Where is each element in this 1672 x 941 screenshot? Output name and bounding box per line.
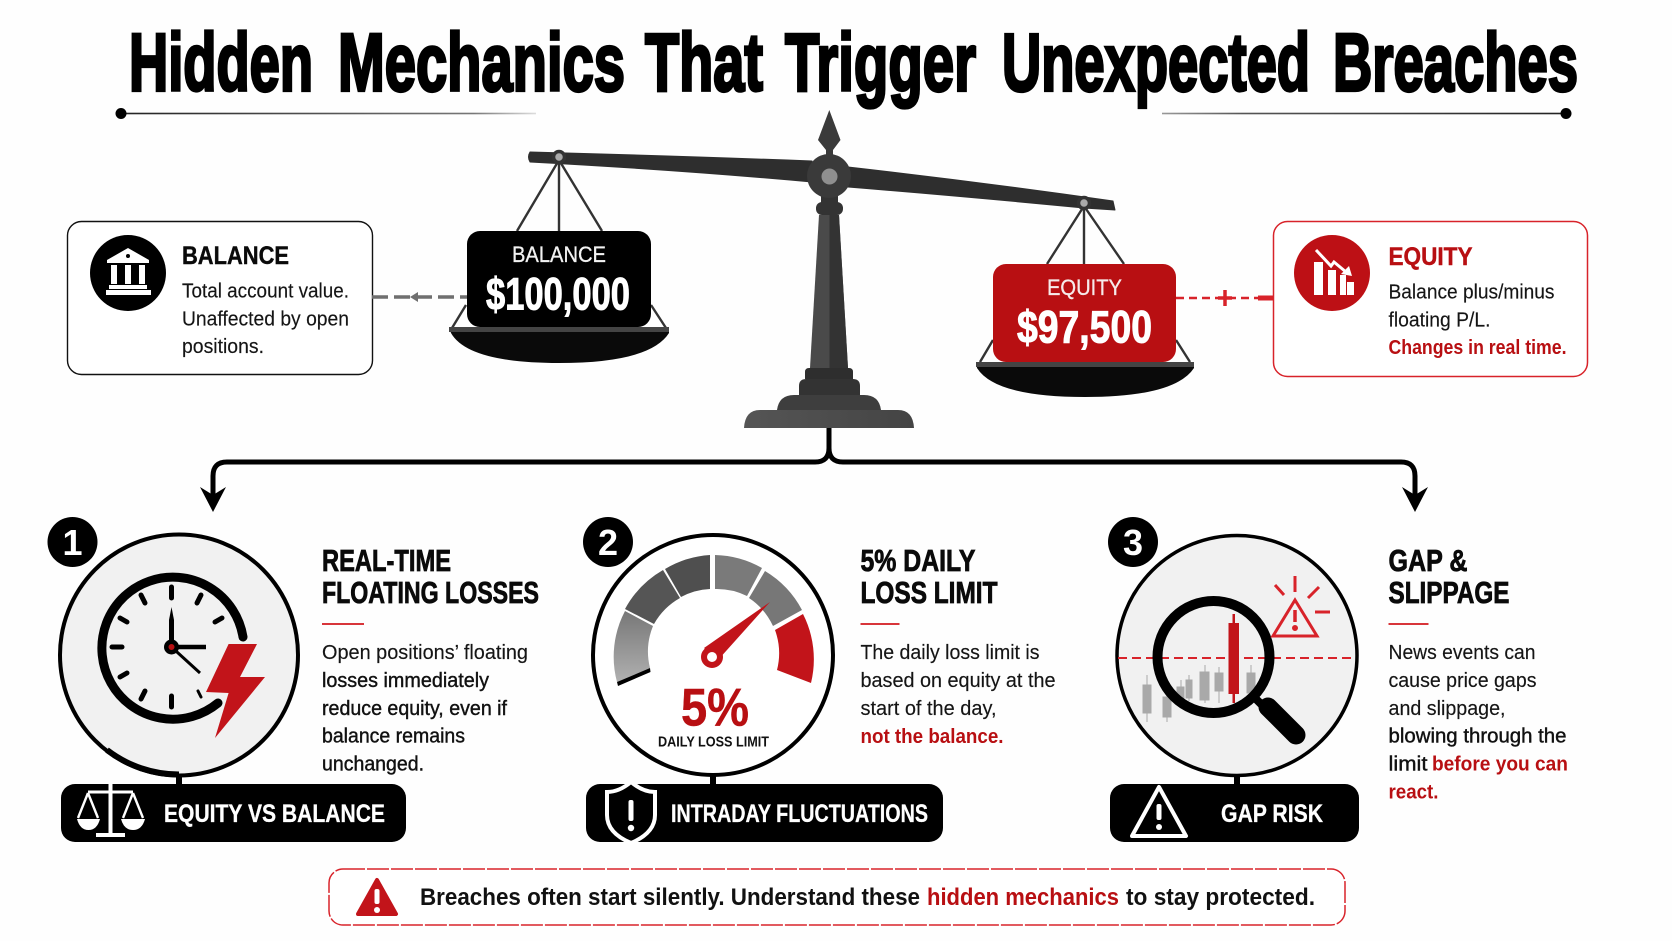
text 1: reduce equity, even if [322,698,507,720]
footer callout [329,869,1345,925]
balance sign: BALANCE [512,242,606,267]
text 3: before you can [1432,754,1568,776]
pill: intraday fluctuations [586,782,943,843]
chart medallion [1117,536,1357,786]
red candlestick [1228,614,1239,703]
text 3: blowing through the [1388,726,1566,748]
gauge medallion [593,535,833,786]
icon: clock [102,577,243,719]
text 2 [860,642,1056,748]
equity sign: $97,500 [1017,302,1152,352]
title: That [645,18,763,108]
heading 3: SLIPPAGE [1388,575,1510,610]
connector: equity sign to panel [1176,290,1273,306]
equity heading: EQUITY [1388,243,1473,271]
equity info panel [1274,222,1588,376]
heading 2: LOSS LIMIT [860,575,998,610]
pill: equity vs balance: EQUITY VS BALANCE [164,800,385,828]
section 1: real-time floating losses [48,517,539,842]
icon: alert triangle [1273,576,1330,636]
right pan [976,362,1194,397]
equity description: floating P/L. [1388,310,1490,332]
text 1: balance remains [322,726,465,748]
balance description [182,280,349,358]
gauge needle [704,602,770,665]
icon: lightning bolt [206,644,265,738]
title: Mechanics [338,18,625,108]
text 1: losses immediately [322,670,489,692]
beam finial and pivot [807,110,851,198]
title [129,18,1578,108]
heading 3 [1388,543,1510,610]
branching arrows [200,428,1428,512]
title divider right [1162,108,1572,119]
right hanger [980,198,1190,362]
text 3: react. [1388,782,1438,804]
icon: warning triangle [1132,787,1186,836]
text 3: News events can [1388,642,1536,664]
balance description: Unaffected by open [182,308,349,330]
balance sign [467,231,651,327]
icon: shield [607,782,655,843]
balance sign: $100,000 [486,268,630,320]
heading 1 [322,543,539,610]
left hanger [452,152,666,328]
arrowhead right [1402,487,1428,512]
number badge 3 [1108,517,1158,567]
text 1: Open positions’ floating [322,642,528,664]
text 1: unchanged. [322,754,424,776]
icon: scales [77,782,145,835]
text 3: limit [1388,754,1428,776]
title: Unexpected [1002,18,1310,108]
text 3: cause price gaps [1388,670,1536,692]
gauge dial [614,555,814,686]
footer message: Breaches often start silently. Understand these [420,884,920,911]
left pan [449,327,669,363]
heading 1: FLOATING LOSSES [322,575,539,610]
text 2: start of the day, [860,698,996,720]
pill: gap risk [1110,784,1359,842]
scale beam [528,152,1115,210]
pill: gap risk: GAP RISK [1221,800,1323,828]
pill: intraday fluctuations: INTRADAY FLUCTUATIONS [671,800,928,828]
section 2: daily loss limit [583,517,1056,843]
text 3 [1388,642,1568,804]
equity sign [993,264,1176,362]
title: Hidden [129,18,313,108]
footer message: hidden mechanics [927,884,1119,911]
title divider left [116,108,536,119]
number badge 3: 3 [1123,522,1143,563]
icon: warning [358,880,396,914]
red rule 1 [322,623,364,625]
gap line [1118,657,1356,659]
footer message: to stay protected. [1126,884,1315,911]
icon: magnifying glass [1158,601,1296,735]
number badge 2: 2 [598,522,618,563]
connector: balance panel to sign [372,292,467,302]
gauge caption: DAILY LOSS LIMIT [658,734,769,750]
text 2: based on equity at the [860,670,1056,692]
scale post and base [744,195,914,428]
balance scale [449,110,1194,428]
text 2: not the balance. [860,726,1004,748]
icon: falling chart [1294,235,1370,311]
number badge 1 [48,517,98,567]
balance heading: BALANCE [182,242,289,270]
clock medallion [60,534,298,786]
footer message [420,884,1315,911]
equity description: Changes in real time. [1388,337,1566,359]
red rule 3 [1388,623,1428,625]
balance description: positions. [182,336,264,358]
pill: equity vs balance [61,782,406,842]
red rule 2 [860,623,900,625]
text 3: and slippage, [1388,698,1506,720]
section 3: gap and slippage [1108,517,1568,842]
gray candlesticks [1143,665,1255,722]
arrowhead left [200,487,226,512]
equity sign: EQUITY [1047,275,1122,300]
balance info panel [68,222,372,374]
text 2: The daily loss limit is [860,642,1040,664]
balance description: Total account value. [182,280,349,302]
number badge 1: 1 [62,522,83,563]
equity description [1388,282,1566,359]
title: Trigger [785,18,976,108]
number badge 2 [583,517,633,567]
heading 2: 5% DAILY [860,543,976,578]
heading 2 [860,543,998,610]
heading 1: REAL-TIME [322,543,451,578]
text 1 [322,642,528,776]
gauge value: 5% [681,678,749,738]
icon: bank [90,235,166,311]
equity description: Balance plus/minus [1388,282,1554,304]
heading 3: GAP & [1388,543,1468,578]
